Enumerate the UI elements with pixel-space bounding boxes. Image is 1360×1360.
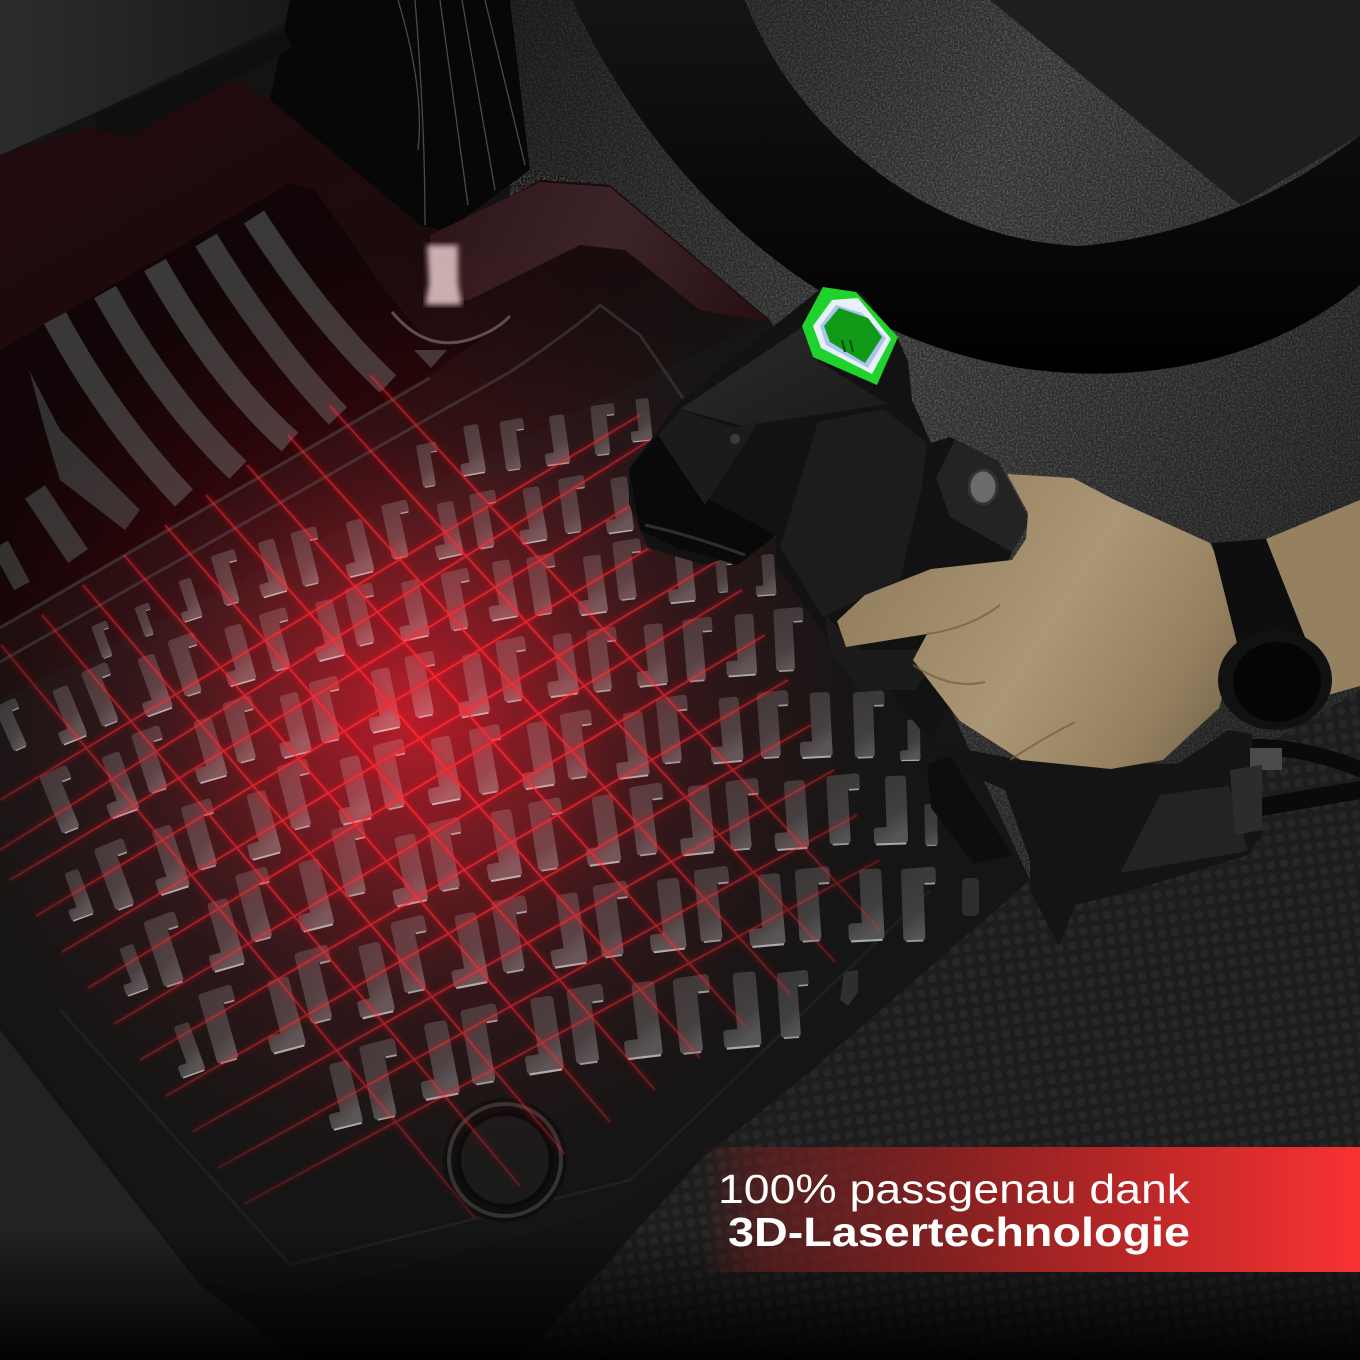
light reflection	[425, 245, 462, 305]
floor mat tread pattern	[0, 398, 979, 1130]
bottom left sill	[0, 1030, 300, 1360]
tread row 4	[39, 607, 806, 834]
carpet	[510, 0, 1360, 880]
mat heel ridge	[0, 183, 510, 625]
caption line 1: 100% passgenau dank	[718, 1166, 1191, 1212]
tread row 2	[91, 475, 634, 659]
finger creases	[913, 605, 1075, 760]
upper right panel inside steering wheel	[990, 0, 1360, 205]
scanner connector	[1230, 748, 1282, 835]
scanner grip texture	[780, 409, 927, 617]
scanner lower body	[931, 730, 1262, 946]
floor mat	[0, 80, 1030, 1300]
tread row 8	[317, 970, 858, 1130]
small diamond	[414, 350, 447, 368]
scanner side trim	[658, 410, 760, 505]
green status display	[802, 287, 898, 385]
tread row 5	[56, 690, 921, 921]
3D laser scanner	[629, 287, 1282, 946]
caption banner	[700, 1147, 1360, 1272]
scene bottom vignette	[0, 1230, 1360, 1360]
mat rim highlight	[430, 182, 770, 322]
laser grid lines	[0, 375, 880, 1218]
textured clip at mat top	[95, 30, 292, 136]
tread row 1	[416, 398, 653, 488]
tread row 6	[111, 773, 945, 996]
laser lines falling right	[1, 375, 880, 1218]
scanner lower knob	[927, 756, 1012, 864]
smartwatch	[1218, 630, 1332, 730]
laser line halo	[0, 375, 880, 1218]
steering wheel	[572, 0, 1360, 374]
round fastening button	[443, 1098, 567, 1222]
pedal	[270, 0, 530, 232]
wrist strap	[1212, 539, 1310, 655]
forearm	[1266, 500, 1360, 695]
caption line 2: 3D-Lasertechnologie	[728, 1209, 1190, 1255]
tread row 7	[164, 866, 979, 1078]
lower right floor	[520, 690, 1360, 1360]
scanner head top	[680, 326, 887, 426]
laser glow	[8, 313, 812, 1120]
hand	[837, 474, 1243, 769]
heel bars	[0, 217, 388, 586]
index finger rest	[825, 615, 945, 690]
ridge lines	[0, 305, 800, 662]
scanner upper silhouette	[629, 287, 1030, 743]
scanner lower right facet	[1120, 786, 1248, 873]
scanner lens	[629, 435, 776, 565]
cables	[1233, 747, 1360, 812]
tread row 3	[0, 538, 777, 752]
lens highlight	[645, 525, 745, 555]
tapered bar	[29, 370, 140, 530]
mat tint	[0, 80, 770, 700]
bottom lip	[60, 890, 930, 1265]
curved ridge	[392, 312, 510, 343]
laser lines rising right	[0, 415, 880, 1204]
thumb button	[936, 439, 1030, 552]
top left interior panel	[0, 0, 335, 155]
